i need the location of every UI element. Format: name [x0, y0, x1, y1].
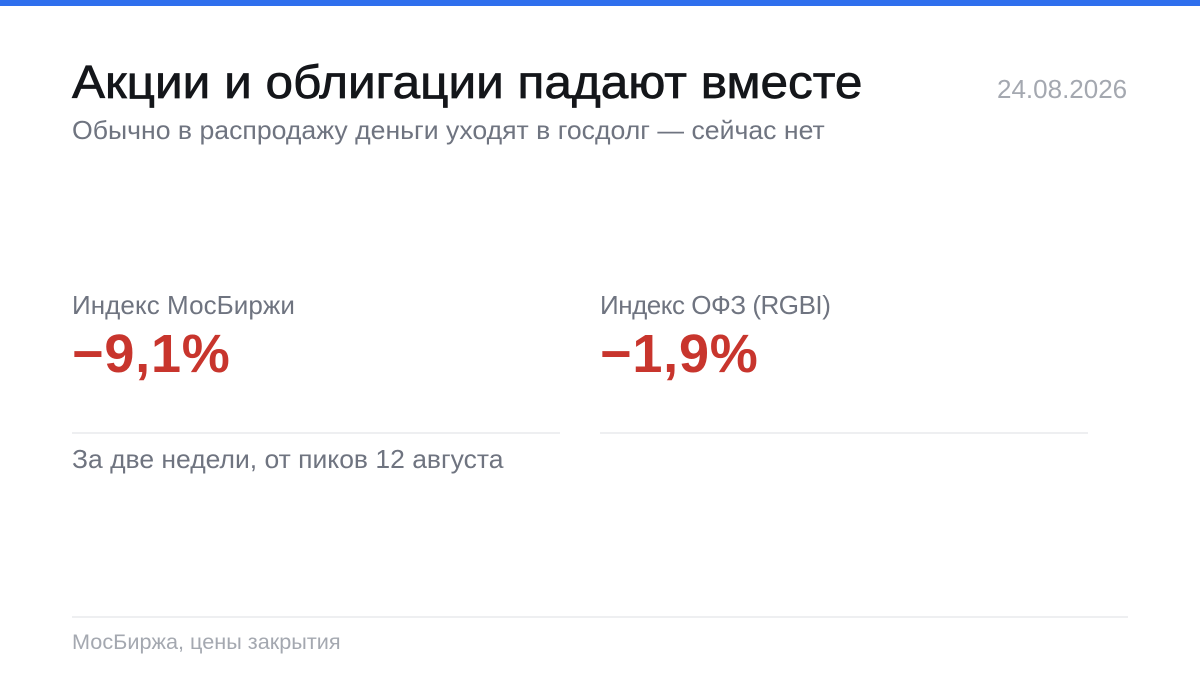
title: Акции и облигации падают вместе: [72, 56, 862, 108]
date: 24.08.2026: [997, 74, 1127, 104]
label: RGBI index: Индекс ОФЗ (RGBI): [600, 290, 830, 320]
subtitle: Обычно в распродажу деньги уходят в госдолг — сейчас нет: [72, 115, 825, 145]
value: RGBI change: −1,9%: [600, 324, 759, 384]
value: MOEX change: −9,1%: [72, 324, 231, 384]
source note: МосБиржа, цены закрытия: [72, 631, 341, 654]
divider: [600, 432, 1088, 434]
label: MOEX index: Индекс МосБиржи: [72, 290, 295, 320]
panel: MOEX index: [72, 290, 560, 474]
panel: RGBI index: [600, 290, 1088, 434]
footer divider: [72, 616, 1128, 618]
top accent bar: [0, 0, 1200, 6]
divider: [72, 432, 560, 434]
note: period: За две недели, от пиков 12 августа: [72, 444, 503, 474]
